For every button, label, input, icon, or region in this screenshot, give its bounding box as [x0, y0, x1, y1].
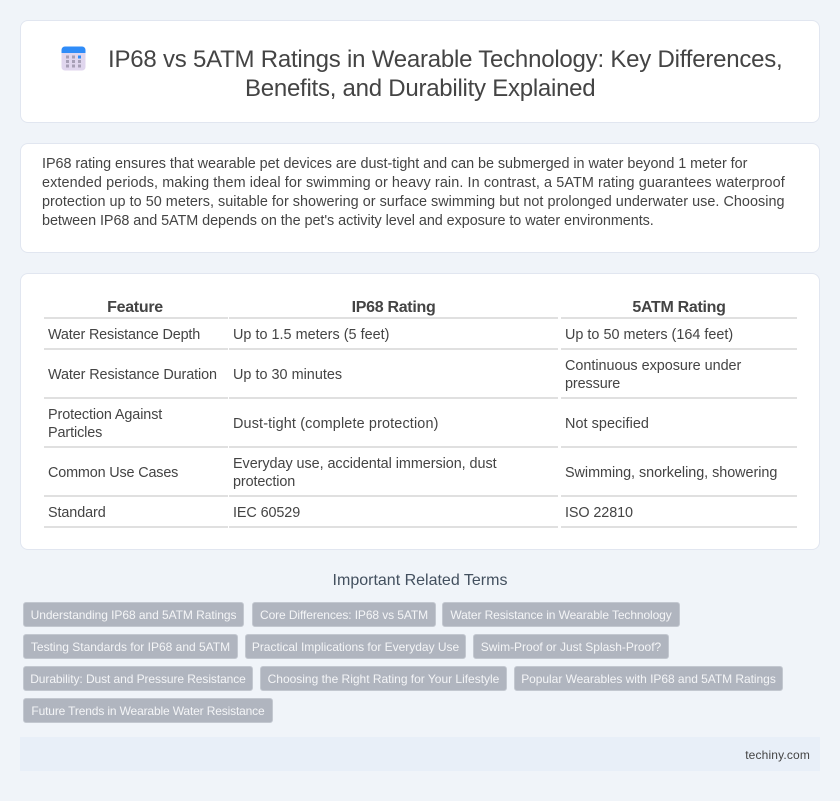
row: use cases: Common Use Cases — [48, 465, 178, 481]
row: standard — [48, 505, 633, 521]
row: particles: Particles — [48, 425, 102, 441]
row: particles: Dust-tight (complete protection) — [233, 416, 439, 432]
header panel — [20, 20, 820, 123]
title: IP68 vs 5ATM Ratings in Wearable Technology: Key Differences, — [108, 46, 782, 73]
related term tags: Water Resistance in Wearable Technology — [450, 608, 672, 622]
related term tags — [23, 602, 783, 723]
related term tags: Choosing the Right Rating for Your Lifestyle — [268, 672, 499, 686]
row: standard: ISO 22810 — [565, 505, 633, 521]
row: duration: Up to 30 minutes — [233, 367, 342, 383]
row: standard: Standard — [48, 505, 106, 521]
table header — [107, 299, 726, 316]
related term tags: Durability: Dust and Pressure Resistance — [30, 672, 246, 686]
related term tags: Popular Wearables with IP68 and 5ATM Ratings — [521, 672, 776, 686]
row: use cases: Everyday use, accidental immersion, dust — [233, 456, 497, 472]
table header: IP68 Rating — [352, 299, 435, 316]
related term tags: Testing Standards for IP68 and 5ATM — [31, 640, 230, 654]
row: duration — [48, 358, 742, 392]
row: duration: pressure — [565, 376, 620, 392]
row: use cases — [48, 456, 777, 490]
row: depth — [48, 327, 733, 343]
footer credit: techiny.com — [745, 748, 810, 762]
row: use cases: Swimming, snorkeling, showering — [565, 465, 777, 481]
title — [108, 46, 782, 102]
row: duration: Continuous exposure under — [565, 358, 741, 374]
related term tags: Understanding IP68 and 5ATM Ratings — [31, 608, 236, 622]
row: depth: Water Resistance Depth — [48, 327, 200, 343]
table header: 5ATM Rating — [632, 299, 726, 316]
panel: comparison table — [20, 273, 820, 550]
table header: Feature — [107, 299, 163, 316]
row: depth: Up to 50 meters (164 feet) — [565, 327, 733, 343]
related term tags: Future Trends in Wearable Water Resistance — [31, 704, 265, 718]
row: particles: Not specified — [565, 416, 649, 432]
panel: intro text: IP68 rating ensures that wearable pet devices are dust-tight and can be submerged in water beyond 1 meter for — [42, 156, 747, 172]
row: depth: Up to 1.5 meters (5 feet) — [233, 327, 389, 343]
heading: related terms: Important Related Terms — [333, 572, 507, 589]
panel: intro text: between IP68 and 5ATM depends on the pet's activity level and exposure to water environments. — [42, 213, 654, 229]
row: duration: Water Resistance Duration — [48, 367, 217, 383]
row: particles: Protection Against — [48, 407, 162, 423]
icon: calendar — [62, 46, 86, 70]
related term tags: Practical Implications for Everyday Use — [252, 640, 459, 654]
row: use cases: protection — [233, 474, 295, 490]
title: Benefits, and Durability Explained — [245, 75, 595, 102]
footer — [20, 737, 820, 771]
row: particles — [48, 407, 649, 441]
related term tags: Swim-Proof or Just Splash-Proof? — [481, 640, 661, 654]
related term tags: Core Differences: IP68 vs 5ATM — [260, 608, 428, 622]
row: standard: IEC 60529 — [233, 505, 300, 521]
panel: intro text — [20, 143, 820, 253]
panel: intro text: protection up to 50 meters, suitable for showering or surface swimming but not prolonged underwater use. Choosing — [42, 194, 785, 210]
panel: intro text: extended periods, making them ideal for swimming or heavy rain. In contrast, a 5ATM rating guarantees waterproof — [42, 175, 785, 191]
